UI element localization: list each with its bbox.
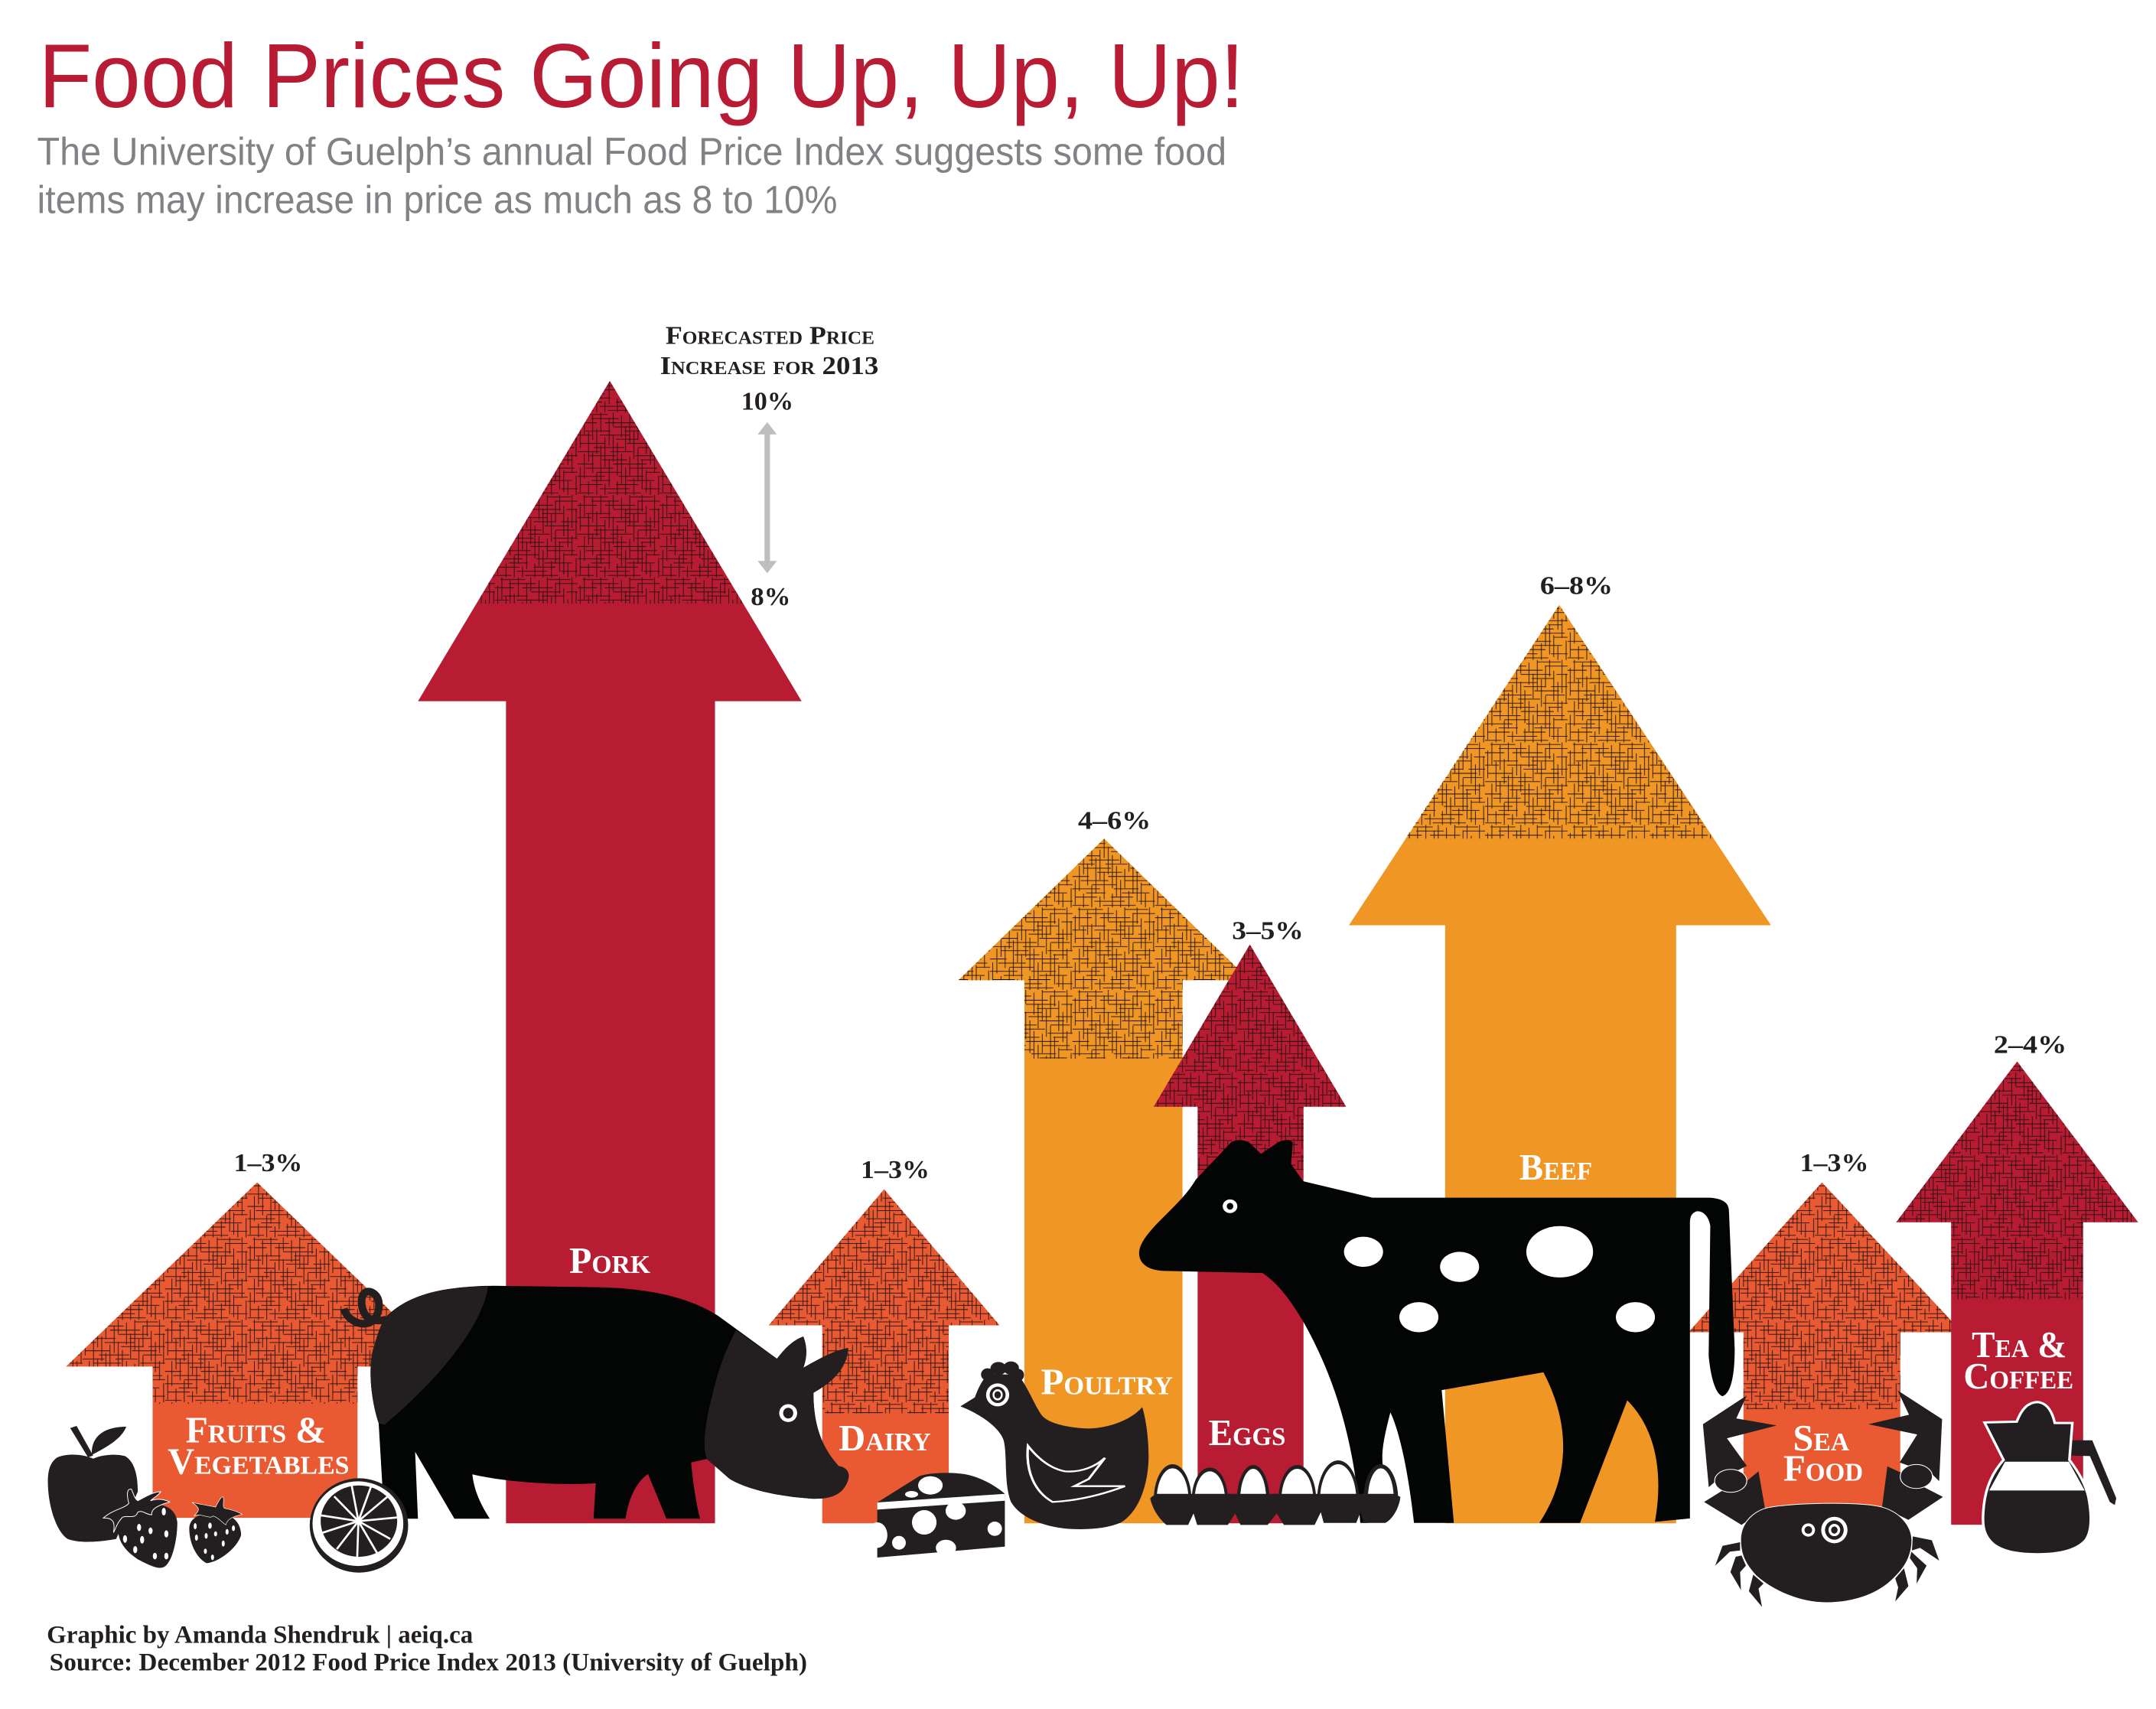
legend: forecasted price increase: 8% [751, 583, 790, 611]
icon: crab [1703, 1390, 1943, 1607]
arrow: tea and coffee [1896, 1061, 2138, 1525]
arrow: poultry [959, 838, 1250, 1523]
label: sea food: Food [1783, 1449, 1863, 1489]
icon: cheese [867, 1473, 1005, 1558]
credits: Graphic by Amanda Shendruk | aeiq.ca [47, 1621, 473, 1649]
percentage labels: 2–4% [1994, 1031, 2066, 1060]
arrow: dairy [769, 1190, 1000, 1523]
label: tea and coffee [1963, 1325, 2073, 1397]
arrow: sea food [1689, 1183, 1962, 1512]
legend: forecasted price increase [660, 321, 878, 611]
icon: strawberries [103, 1489, 243, 1567]
percentage labels: 1–3% [861, 1156, 930, 1184]
legend: forecasted price increase: Forecasted Price [666, 321, 874, 350]
credits [47, 1621, 807, 1676]
percentage labels [234, 571, 2066, 1184]
subtitle: items may increase in price as much as 8 to 10% [37, 178, 837, 222]
legend: forecasted price increase: 10% [741, 388, 793, 416]
arrow: eggs [1154, 945, 1346, 1523]
percentage labels: 6–8% [1540, 571, 1613, 600]
label: tea and coffee: Tea & [1972, 1325, 2066, 1366]
label: dairy: Dairy [839, 1418, 931, 1459]
percentage labels: 3–5% [1232, 916, 1304, 945]
title: Food Prices Going Up, Up, Up! [38, 26, 1244, 127]
label: sea food [1783, 1418, 1863, 1489]
label: fruits and vegetables: Fruits & [186, 1410, 326, 1450]
icon: hen [960, 1362, 1148, 1529]
subtitle [37, 130, 1226, 222]
label: fruits and vegetables [168, 1410, 349, 1483]
percentage labels: 4–6% [1078, 807, 1151, 835]
icon: apple [48, 1426, 138, 1541]
icon: pig [344, 1286, 848, 1519]
label: tea and coffee: Coffee [1963, 1356, 2073, 1397]
icon: cow [1139, 1140, 1734, 1523]
label: pork: Pork [569, 1241, 651, 1281]
arrow: fruits and vegetables [66, 1183, 448, 1518]
label: fruits and vegetables: Vegetables [168, 1442, 349, 1483]
arrow: beef [1349, 605, 1771, 1523]
percentage labels: 1–3% [234, 1149, 302, 1177]
icon: egg carton [1150, 1460, 1400, 1525]
subtitle: The University of Guelph’s annual Food Price Index suggests some food [37, 130, 1226, 174]
icon: coffee pot [1983, 1402, 2116, 1554]
arrow: pork [418, 381, 802, 1523]
label: beef: Beef [1519, 1147, 1592, 1188]
label: poultry: Poultry [1041, 1362, 1173, 1402]
credits: Source: December 2012 Food Price Index 2013 (University of Guelph) [50, 1649, 807, 1676]
icon: orange slice [310, 1478, 408, 1573]
percentage labels: 1–3% [1800, 1149, 1868, 1177]
label: eggs: Eggs [1209, 1413, 1285, 1453]
label: sea food: Sea [1793, 1418, 1850, 1459]
legend: forecasted price increase: Increase for 2013 [660, 352, 878, 380]
